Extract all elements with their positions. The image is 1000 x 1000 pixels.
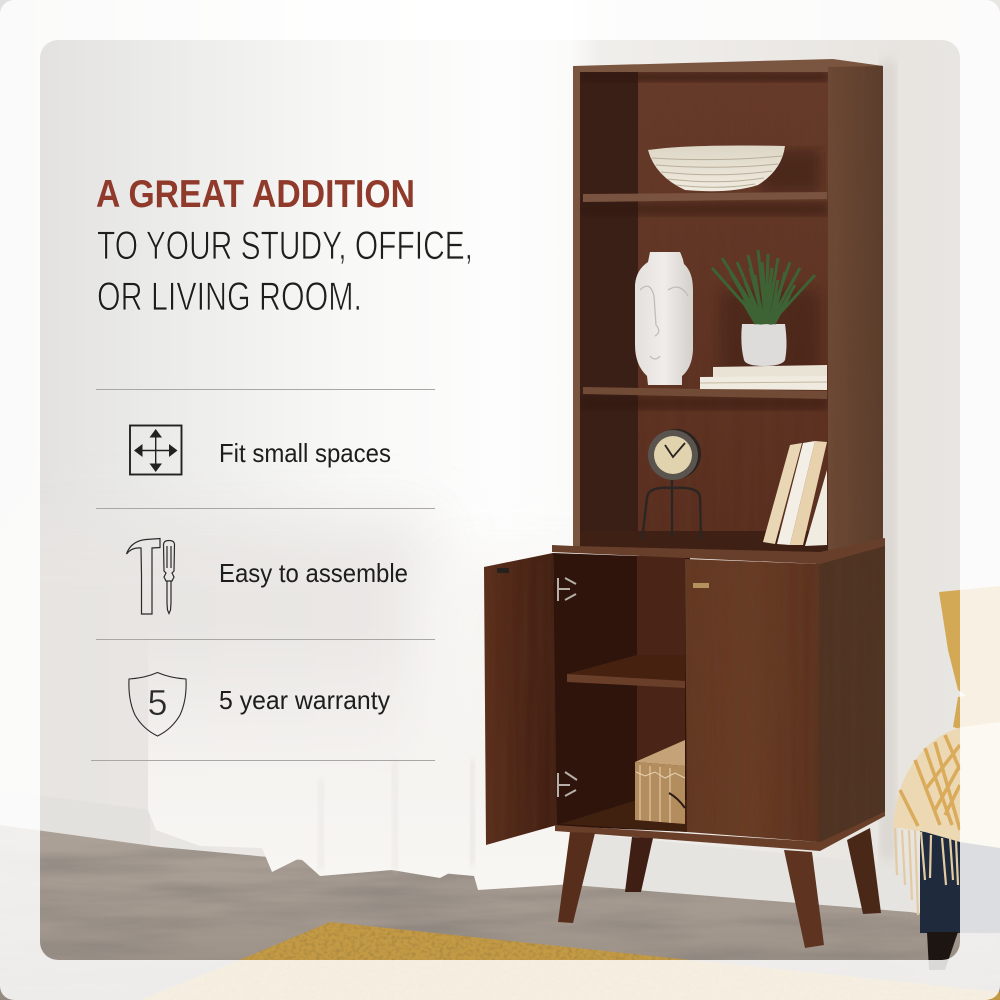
dark inner side (580, 72, 638, 531)
back right leg (847, 828, 881, 914)
icon: shield with 5: 5 (147, 682, 168, 723)
brass handle (693, 583, 709, 588)
table clock (642, 429, 701, 540)
fringe (895, 828, 958, 915)
interior shelf front (567, 674, 685, 688)
striped blanket (893, 722, 1000, 848)
seat base (920, 830, 1000, 933)
hutch front frame and top (573, 59, 883, 552)
hinges (558, 578, 577, 797)
ribbed bowl (648, 146, 785, 191)
yellow pillow (939, 586, 1000, 720)
baseboard left (0, 790, 150, 850)
interior shelf top (567, 655, 685, 681)
sheer curtain (148, 0, 572, 890)
open left door (484, 553, 557, 845)
title second line: TO YOUR STUDY, OFFICE, (97, 224, 473, 268)
armchair (893, 586, 1000, 970)
title third line: OR LIVING ROOM. (97, 275, 362, 319)
feature: 5 year warranty (129, 672, 390, 736)
wood floor (0, 825, 1000, 1000)
leaning books (763, 441, 827, 546)
shelf shadows (638, 72, 828, 411)
divider lines (91, 390, 435, 760)
icon: shield with 5 (129, 672, 186, 736)
cabinet interior (553, 553, 690, 832)
icon: hammer and screwdriver (126, 538, 174, 614)
label: 5 year warranty (219, 685, 390, 715)
label: Easy to assemble (219, 558, 408, 588)
bookcase hutch (573, 59, 883, 552)
hutch side panel (828, 60, 883, 552)
yellow rug (140, 922, 1000, 1000)
cabinet (484, 538, 885, 948)
shelf two (583, 387, 827, 399)
hutch back panel (580, 72, 828, 531)
baseboard right (570, 832, 910, 915)
face vase (635, 252, 693, 385)
cabinet side panel (816, 541, 885, 845)
wall shadow behind bookcase (880, 60, 896, 860)
closed right door (685, 559, 819, 842)
shelf one (583, 192, 827, 202)
title (96, 173, 473, 319)
potted plant (712, 250, 815, 366)
feature: easy to assemble (126, 538, 408, 614)
back left leg (625, 837, 653, 892)
feature: fit small spaces (130, 426, 391, 474)
decorative box (635, 740, 685, 824)
lower tints on the left (182, 514, 484, 876)
front right leg (784, 850, 824, 948)
cabinet floor (560, 800, 687, 832)
front left leg (558, 832, 595, 923)
icon: move arrows in box (130, 426, 182, 474)
cabinet back panel (637, 556, 685, 828)
chair leg (927, 932, 958, 970)
stacked white books (700, 365, 827, 390)
cabinet top surface inside hutch (580, 531, 828, 552)
title bold line: A GREAT ADDITION (96, 173, 415, 216)
label: Fit small spaces (219, 438, 391, 468)
cabinet top (552, 538, 885, 564)
cabinet base (555, 812, 885, 851)
